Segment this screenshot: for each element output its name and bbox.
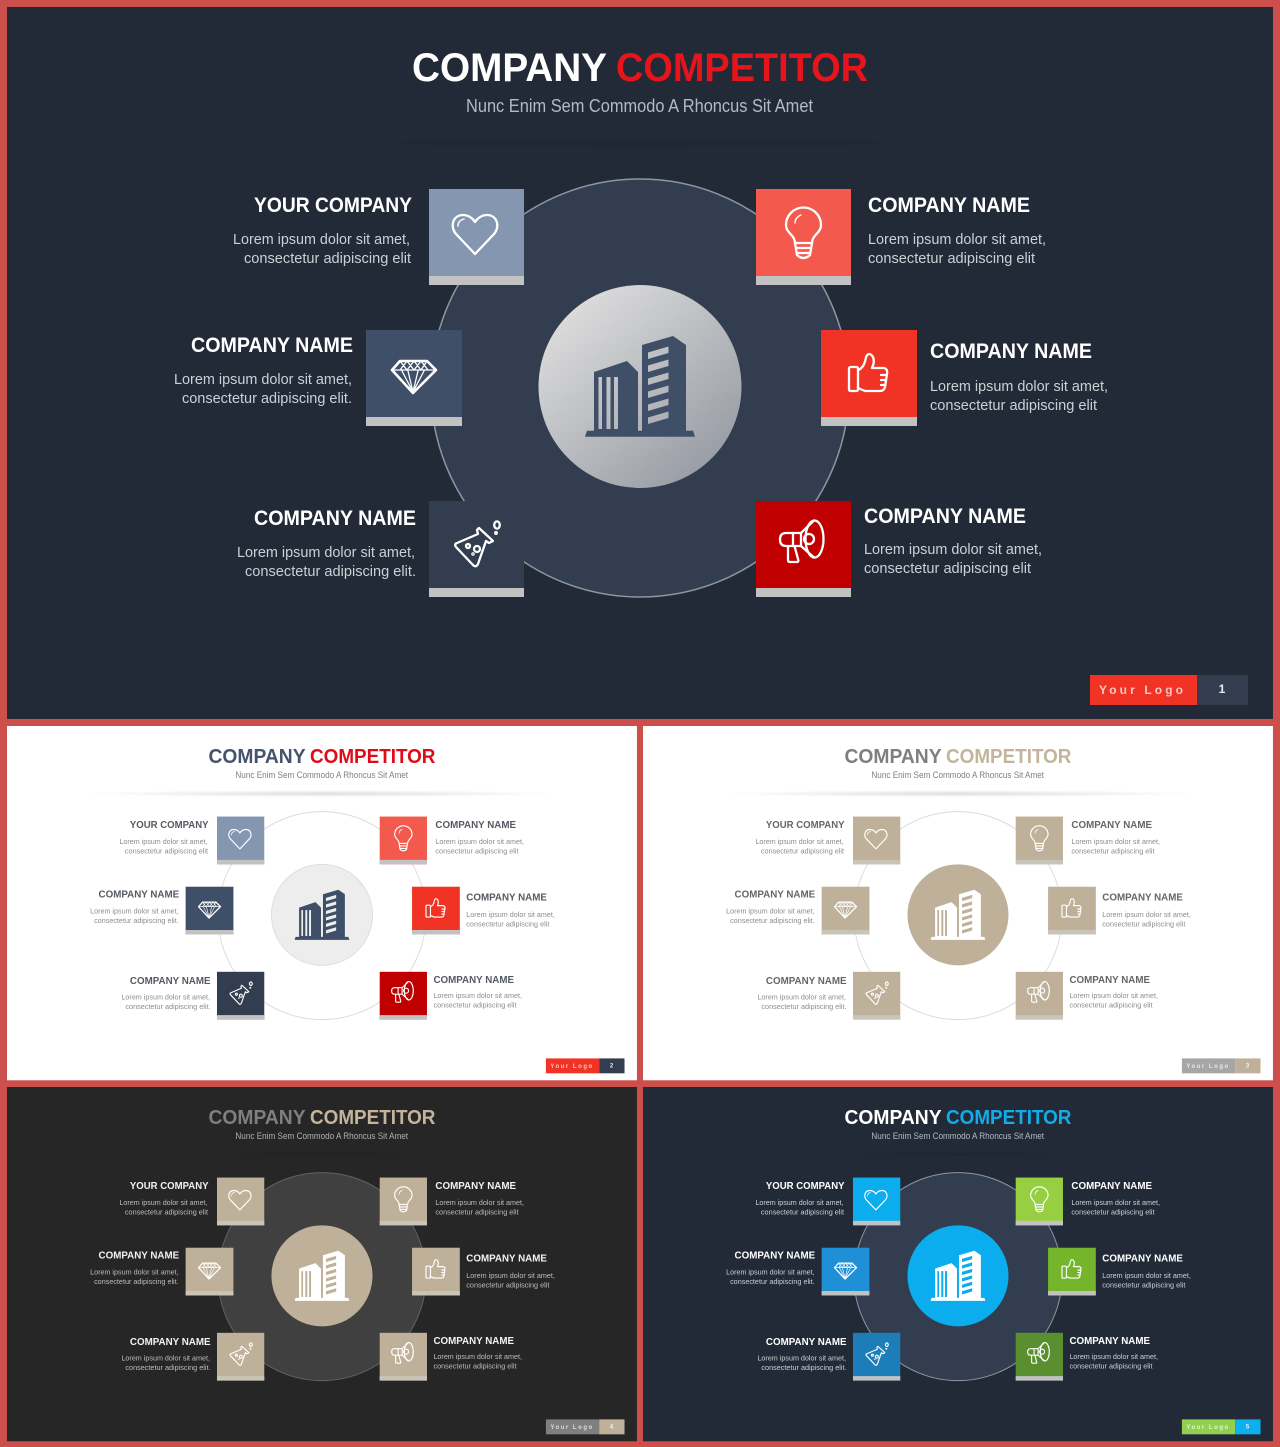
description: consectetur adipiscing elit. xyxy=(730,1277,815,1286)
description: consectetur adipiscing elit xyxy=(1102,920,1186,929)
description: consectetur adipiscing elit xyxy=(1069,1001,1153,1010)
description: Lorem ipsum dolor sit amet, xyxy=(930,378,1108,395)
footer logo bar: Your Logo xyxy=(550,1425,593,1431)
description xyxy=(1071,837,1160,855)
card: company name, diamond xyxy=(90,1248,233,1295)
footer logo bar: Your Logo xyxy=(550,1064,593,1070)
outer circle xyxy=(218,1173,426,1381)
description xyxy=(1071,1198,1160,1216)
icon tile: heart xyxy=(217,1178,264,1225)
description: consectetur adipiscing elit xyxy=(868,250,1036,267)
card: company name, bulb xyxy=(380,817,524,864)
title: COMPANY xyxy=(845,746,942,768)
card: company name, flask xyxy=(757,972,900,1020)
description: Lorem ipsum dolor sit amet, xyxy=(435,837,524,846)
icon tile: flask xyxy=(853,972,900,1020)
card: company name, flask xyxy=(237,501,524,597)
icon tile: bulb xyxy=(1016,817,1063,864)
description xyxy=(90,907,179,925)
outer circle xyxy=(218,812,426,1020)
outer circle xyxy=(854,1173,1062,1381)
center circle with building icon xyxy=(907,864,1008,965)
title xyxy=(209,1107,435,1129)
title xyxy=(209,746,435,768)
description: consectetur adipiscing elit. xyxy=(94,916,179,925)
outer circle xyxy=(854,812,1062,1020)
icon tile: diamond xyxy=(822,887,869,934)
footer logo bar: 5 xyxy=(1246,1424,1250,1430)
description xyxy=(435,1198,524,1216)
description: consectetur adipiscing elit xyxy=(1071,846,1155,855)
center circle with building icon xyxy=(271,864,372,965)
title: COMPETITOR xyxy=(946,1107,1071,1129)
slide 1: large dark slide xyxy=(7,7,1273,719)
description: Lorem ipsum dolor sit amet, xyxy=(466,910,555,919)
title: COMPANY xyxy=(412,46,607,90)
description xyxy=(726,1268,815,1286)
description: Lorem ipsum dolor sit amet, xyxy=(726,1268,815,1277)
description: Lorem ipsum dolor sit amet, xyxy=(90,907,179,916)
title: COMPETITOR xyxy=(310,746,435,768)
description: Lorem ipsum dolor sit amet, xyxy=(119,1198,208,1207)
description: Lorem ipsum dolor sit amet, xyxy=(1071,837,1160,846)
title xyxy=(412,46,868,90)
icon tile: heart xyxy=(429,189,524,285)
description: consectetur adipiscing elit xyxy=(466,920,550,929)
description xyxy=(433,1352,522,1371)
title xyxy=(845,1107,1071,1129)
description: consectetur adipiscing elit xyxy=(930,397,1098,414)
icon tile: flask xyxy=(853,1333,900,1381)
icon tile: megaphone xyxy=(380,972,427,1020)
footer logo bar: Your Logo xyxy=(1186,1425,1229,1431)
description: Lorem ipsum dolor sit amet, xyxy=(237,544,415,561)
heading: YOUR COMPANY xyxy=(766,1181,845,1192)
description: consectetur adipiscing elit xyxy=(1071,1207,1155,1216)
description: Lorem ipsum dolor sit amet, xyxy=(174,371,352,388)
icon tile: megaphone xyxy=(1016,972,1063,1020)
description: Lorem ipsum dolor sit amet, xyxy=(1069,1352,1158,1361)
icon tile: thumbs up xyxy=(821,330,917,426)
description xyxy=(233,231,412,267)
heading: YOUR COMPANY xyxy=(130,1181,209,1192)
icon tile: megaphone xyxy=(1016,1333,1063,1381)
subtitle: Nunc Enim Sem Commodo A Rhoncus Sit Amet xyxy=(466,96,813,116)
description xyxy=(435,837,524,855)
description xyxy=(757,993,847,1011)
subtitle: Nunc Enim Sem Commodo A Rhoncus Sit Amet xyxy=(235,770,409,780)
heading: COMPANY NAME xyxy=(254,507,416,530)
footer logo bar xyxy=(546,1419,625,1434)
icon tile: heart xyxy=(853,1178,900,1225)
footer logo bar: 3 xyxy=(1246,1063,1250,1069)
card: company name, diamond xyxy=(174,330,462,426)
heading: COMPANY NAME xyxy=(191,334,353,357)
footer logo bar: 4 xyxy=(610,1424,614,1430)
description: Lorem ipsum dolor sit amet, xyxy=(755,1198,844,1207)
title: COMPANY xyxy=(209,1107,306,1129)
description: Lorem ipsum dolor sit amet, xyxy=(433,991,522,1000)
title: COMPANY xyxy=(845,1107,942,1129)
icon tile: diamond xyxy=(366,330,462,426)
description: consectetur adipiscing elit xyxy=(433,1001,517,1010)
description: consectetur adipiscing elit xyxy=(244,250,412,267)
icon tile: flask xyxy=(217,1333,264,1381)
description: Lorem ipsum dolor sit amet, xyxy=(755,837,844,846)
icon tile: heart xyxy=(853,817,900,864)
description: Lorem ipsum dolor sit amet, xyxy=(466,1271,555,1280)
description: Lorem ipsum dolor sit amet, xyxy=(433,1352,522,1361)
description: Lorem ipsum dolor sit amet, xyxy=(90,1268,179,1277)
outer circle xyxy=(431,179,849,597)
slide 5: navy blue and green slide xyxy=(643,1087,1273,1441)
description: Lorem ipsum dolor sit amet, xyxy=(121,993,210,1002)
description: Lorem ipsum dolor sit amet, xyxy=(1102,1271,1191,1280)
footer logo bar xyxy=(1182,1419,1261,1434)
icon tile: megaphone xyxy=(756,501,851,597)
description xyxy=(237,544,416,580)
description xyxy=(930,378,1108,414)
card: company name, megaphone xyxy=(380,1333,522,1381)
icon tile: thumbs up xyxy=(1048,887,1096,934)
card: company name, diamond xyxy=(726,1248,869,1295)
description: Lorem ipsum dolor sit amet, xyxy=(868,231,1046,248)
heading: COMPANY NAME xyxy=(864,505,1026,528)
heading: COMPANY NAME xyxy=(868,194,1030,217)
card: your company xyxy=(233,189,524,285)
description: consectetur adipiscing elit xyxy=(1102,1281,1186,1290)
card: company name, thumb xyxy=(412,887,555,934)
card: company name, megaphone xyxy=(1016,1333,1158,1381)
subtitle: Nunc Enim Sem Commodo A Rhoncus Sit Amet xyxy=(871,770,1045,780)
description xyxy=(1069,1352,1158,1371)
center circle with building icon xyxy=(538,285,742,488)
footer logo bar xyxy=(546,1058,625,1073)
icon tile: thumbs up xyxy=(412,1248,460,1295)
heading: COMPANY NAME xyxy=(1069,1336,1150,1347)
description xyxy=(1102,1271,1191,1290)
description xyxy=(119,1198,209,1216)
heading: COMPANY NAME xyxy=(1102,1254,1183,1265)
icon tile: thumbs up xyxy=(412,887,460,934)
description: consectetur adipiscing elit xyxy=(433,1362,517,1371)
icon tile: bulb xyxy=(380,1178,427,1225)
description: consectetur adipiscing elit xyxy=(435,846,519,855)
description: Lorem ipsum dolor sit amet, xyxy=(726,907,815,916)
description: Lorem ipsum dolor sit amet, xyxy=(119,837,208,846)
heading: COMPANY NAME xyxy=(433,975,514,986)
description: consectetur adipiscing elit xyxy=(466,1281,550,1290)
footer logo bar xyxy=(1090,675,1248,705)
description: consectetur adipiscing elit. xyxy=(245,563,416,580)
title: COMPETITOR xyxy=(310,1107,435,1129)
icon tile: bulb xyxy=(1016,1178,1063,1225)
description xyxy=(868,231,1046,267)
heading: COMPANY NAME xyxy=(735,890,815,901)
heading: COMPANY NAME xyxy=(766,1337,847,1348)
card: your company xyxy=(119,817,264,864)
title: COMPETITOR xyxy=(616,46,868,90)
description: consectetur adipiscing elit. xyxy=(125,1002,211,1011)
description xyxy=(174,371,352,407)
card: company name, megaphone xyxy=(756,501,1042,597)
description: consectetur adipiscing elit. xyxy=(761,1002,847,1011)
description xyxy=(466,910,555,929)
card: your company xyxy=(755,1178,900,1225)
slide 4: charcoal tan slide xyxy=(7,1087,637,1441)
heading: COMPANY NAME xyxy=(130,976,211,987)
heading: YOUR COMPANY xyxy=(766,820,845,831)
description xyxy=(466,1271,555,1290)
icon tile: diamond xyxy=(822,1248,869,1295)
card: company name, thumb xyxy=(821,330,1108,426)
description xyxy=(90,1268,179,1286)
card: company name, bulb xyxy=(1016,1178,1160,1225)
description xyxy=(1069,991,1158,1010)
description: consectetur adipiscing elit. xyxy=(125,1363,211,1372)
icon tile: flask xyxy=(217,972,264,1020)
heading: COMPANY NAME xyxy=(930,340,1092,363)
description: Lorem ipsum dolor sit amet, xyxy=(864,541,1042,558)
card: company name, thumb xyxy=(1048,1248,1191,1295)
subtitle: Nunc Enim Sem Commodo A Rhoncus Sit Amet xyxy=(235,1131,409,1141)
heading: YOUR COMPANY xyxy=(130,820,209,831)
heading: COMPANY NAME xyxy=(1071,1181,1152,1192)
slide 3: white tan slide xyxy=(643,726,1273,1080)
card: company name, thumb xyxy=(412,1248,555,1295)
icon tile: flask xyxy=(429,501,524,597)
icon tile: heart xyxy=(217,817,264,864)
heading: COMPANY NAME xyxy=(466,1254,547,1265)
description xyxy=(119,837,209,855)
card: company name, diamond xyxy=(726,887,869,934)
card: company name, diamond xyxy=(90,887,233,934)
description: consectetur adipiscing elit xyxy=(435,1207,519,1216)
description: consectetur adipiscing elit xyxy=(1069,1362,1153,1371)
description xyxy=(121,1354,211,1372)
heading: COMPANY NAME xyxy=(433,1336,514,1347)
heading: COMPANY NAME xyxy=(766,976,847,987)
description: consectetur adipiscing elit. xyxy=(761,1363,847,1372)
footer logo bar: 2 xyxy=(610,1063,614,1069)
description xyxy=(755,837,845,855)
card: company name, megaphone xyxy=(380,972,522,1020)
footer logo bar: Your Logo xyxy=(1186,1064,1229,1070)
icon tile: diamond xyxy=(186,1248,233,1295)
description: Lorem ipsum dolor sit amet, xyxy=(1102,910,1191,919)
card: company name, flask xyxy=(757,1333,900,1381)
heading: COMPANY NAME xyxy=(1102,893,1183,904)
description: Lorem ipsum dolor sit amet, xyxy=(1071,1198,1160,1207)
card: company name, flask xyxy=(121,972,264,1020)
card: your company xyxy=(755,817,900,864)
description xyxy=(1102,910,1191,929)
description xyxy=(757,1354,847,1372)
slide 2: white slide xyxy=(7,726,637,1080)
card: company name, bulb xyxy=(756,189,1046,285)
description xyxy=(726,907,815,925)
title xyxy=(845,746,1071,768)
description: Lorem ipsum dolor sit amet, xyxy=(757,993,846,1002)
description: consectetur adipiscing elit xyxy=(761,846,845,855)
heading: COMPANY NAME xyxy=(435,820,516,831)
description: consectetur adipiscing elit xyxy=(761,1207,845,1216)
description: consectetur adipiscing elit. xyxy=(94,1277,179,1286)
heading: COMPANY NAME xyxy=(1069,975,1150,986)
description: consectetur adipiscing elit. xyxy=(730,916,815,925)
heading: COMPANY NAME xyxy=(735,1251,815,1262)
icon tile: diamond xyxy=(186,887,233,934)
heading: COMPANY NAME xyxy=(99,890,179,901)
heading: COMPANY NAME xyxy=(1071,820,1152,831)
heading: COMPANY NAME xyxy=(466,893,547,904)
footer logo bar: 1 xyxy=(1219,682,1226,696)
card: company name, megaphone xyxy=(1016,972,1158,1020)
subtitle: Nunc Enim Sem Commodo A Rhoncus Sit Amet xyxy=(871,1131,1045,1141)
icon tile: bulb xyxy=(380,817,427,864)
icon tile: bulb xyxy=(756,189,851,285)
icon tile: megaphone xyxy=(380,1333,427,1381)
title: COMPANY xyxy=(209,746,306,768)
description xyxy=(433,991,522,1010)
footer logo bar xyxy=(1182,1058,1261,1073)
description xyxy=(864,541,1042,577)
description: consectetur adipiscing elit xyxy=(864,560,1032,577)
center circle with building icon xyxy=(907,1225,1008,1326)
description: Lorem ipsum dolor sit amet, xyxy=(121,1354,210,1363)
heading: COMPANY NAME xyxy=(130,1337,211,1348)
icon tile: thumbs up xyxy=(1048,1248,1096,1295)
heading: COMPANY NAME xyxy=(435,1181,516,1192)
heading: YOUR COMPANY xyxy=(254,194,412,217)
description xyxy=(121,993,211,1011)
description: Lorem ipsum dolor sit amet, xyxy=(233,231,410,248)
footer logo bar: Your Logo xyxy=(1099,683,1183,697)
description: consectetur adipiscing elit. xyxy=(182,390,352,407)
description: Lorem ipsum dolor sit amet, xyxy=(1069,991,1158,1000)
card: company name, thumb xyxy=(1048,887,1191,934)
center circle with building icon xyxy=(271,1225,372,1326)
card: company name, bulb xyxy=(1016,817,1160,864)
title: COMPETITOR xyxy=(946,746,1071,768)
description: consectetur adipiscing elit xyxy=(125,846,209,855)
card: company name, bulb xyxy=(380,1178,524,1225)
card: your company xyxy=(119,1178,264,1225)
description xyxy=(755,1198,845,1216)
description: consectetur adipiscing elit xyxy=(125,1207,209,1216)
description: Lorem ipsum dolor sit amet, xyxy=(435,1198,524,1207)
card: company name, flask xyxy=(121,1333,264,1381)
description: Lorem ipsum dolor sit amet, xyxy=(757,1354,846,1363)
heading: COMPANY NAME xyxy=(99,1251,179,1262)
